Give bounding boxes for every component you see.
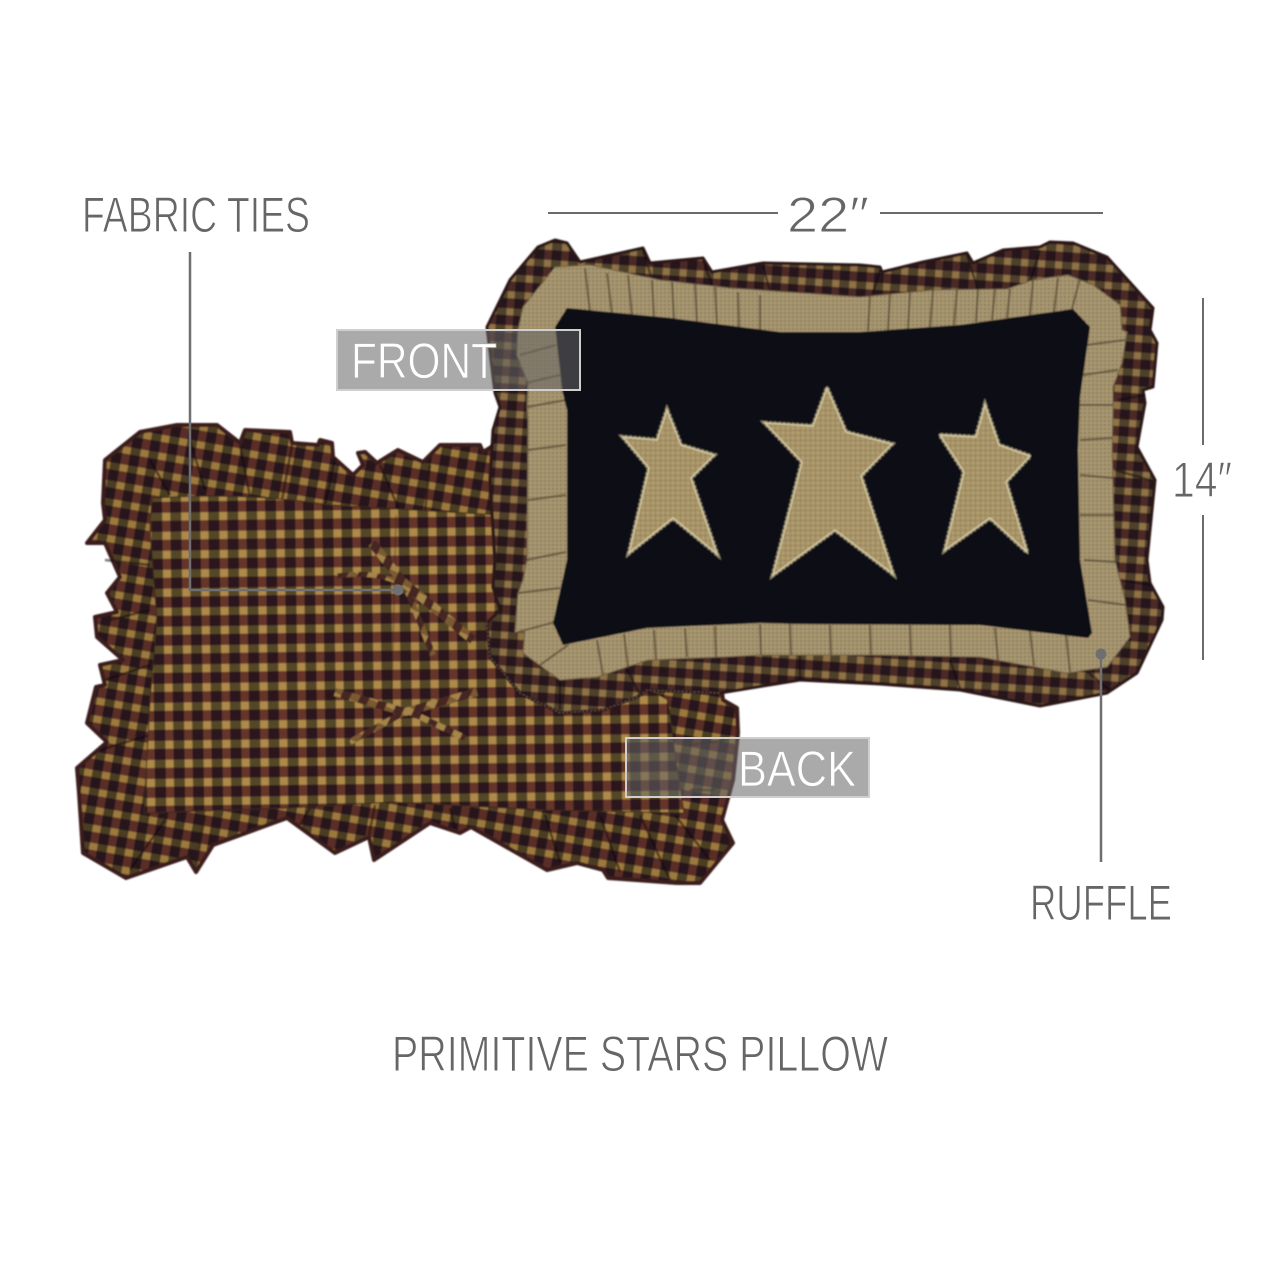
fabric tie upper [337, 543, 473, 655]
front pillow burlap ruffle [515, 265, 1130, 680]
back pillow body [144, 496, 684, 813]
callout: ruffle [1030, 648, 1172, 931]
front ruffle folds [560, 250, 1150, 710]
front pillow black panel [553, 308, 1092, 645]
front pillow [487, 240, 1163, 713]
fabric tie lower [335, 692, 477, 742]
heading: fabric ties callout label: FABRIC TIES [82, 187, 310, 243]
callout line: fabric ties [190, 252, 404, 596]
dimension: height 14 inches: 14″ [1172, 452, 1232, 508]
label: front [337, 330, 580, 390]
front pillow stitched seam [487, 623, 720, 713]
label: back [626, 738, 869, 797]
back pillow [77, 425, 738, 883]
star left [623, 410, 717, 554]
caption: product name: PRIMITIVE STARS PILLOW [392, 1026, 889, 1082]
back pillow ruffle folds [100, 440, 725, 880]
star right [940, 405, 1030, 552]
dimension: width 22 inches: 22″ [787, 187, 869, 243]
burlap ruffle pleats [518, 268, 1126, 675]
callout: ruffle: RUFFLE [1030, 875, 1172, 931]
front pillow check ruffle [487, 240, 1163, 713]
label: front: FRONT [351, 333, 497, 389]
back pillow flap seam [392, 515, 396, 802]
back pillow ruffle [77, 425, 738, 883]
star center [765, 388, 893, 575]
label: back: BACK [738, 741, 856, 797]
